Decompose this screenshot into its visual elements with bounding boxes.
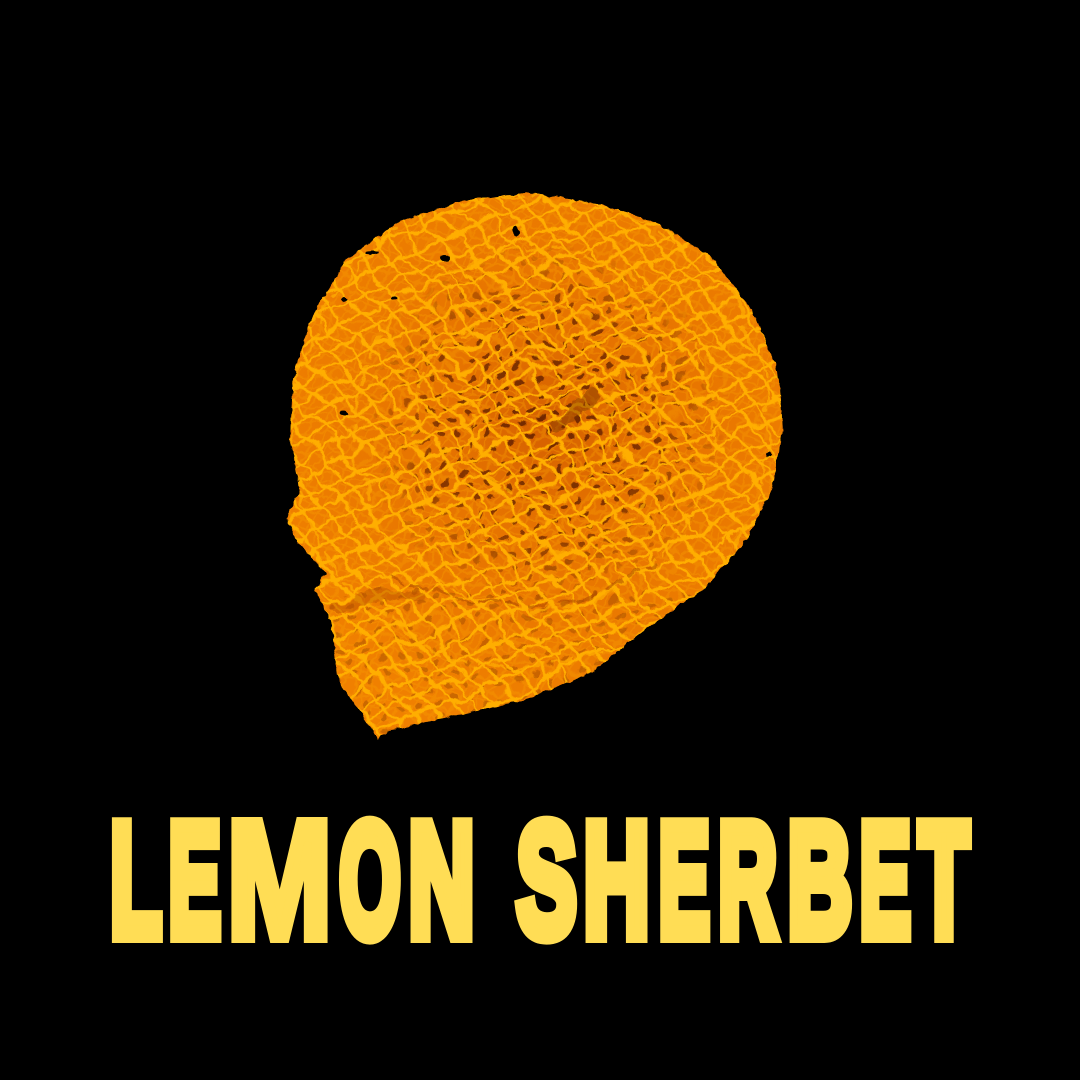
word: LEMON: E <box>169 790 221 970</box>
word: LEMON: L <box>110 790 162 970</box>
word: SHERBET: E <box>860 790 911 970</box>
word: SHERBET: E <box>659 790 710 970</box>
word: SHERBET: T <box>919 790 969 970</box>
poster <box>112 192 972 945</box>
word: SHERBET: S <box>517 790 576 970</box>
fabric folds <box>335 395 660 606</box>
word: LEMON: M <box>227 785 332 974</box>
small black gaps <box>340 226 772 458</box>
word: LEMON: O <box>339 790 400 970</box>
word: LEMON: N <box>409 790 474 970</box>
title: LEMON SHERBET <box>110 785 969 974</box>
mesh strands <box>287 192 783 738</box>
word: SHERBET: H <box>584 790 649 970</box>
product image: orange mesh sponge <box>286 192 784 740</box>
word: SHERBET <box>517 790 969 970</box>
word: SHERBET: R <box>718 790 777 970</box>
word: SHERBET: B <box>788 790 852 970</box>
word: LEMON <box>110 785 474 974</box>
sponge body <box>287 193 783 740</box>
